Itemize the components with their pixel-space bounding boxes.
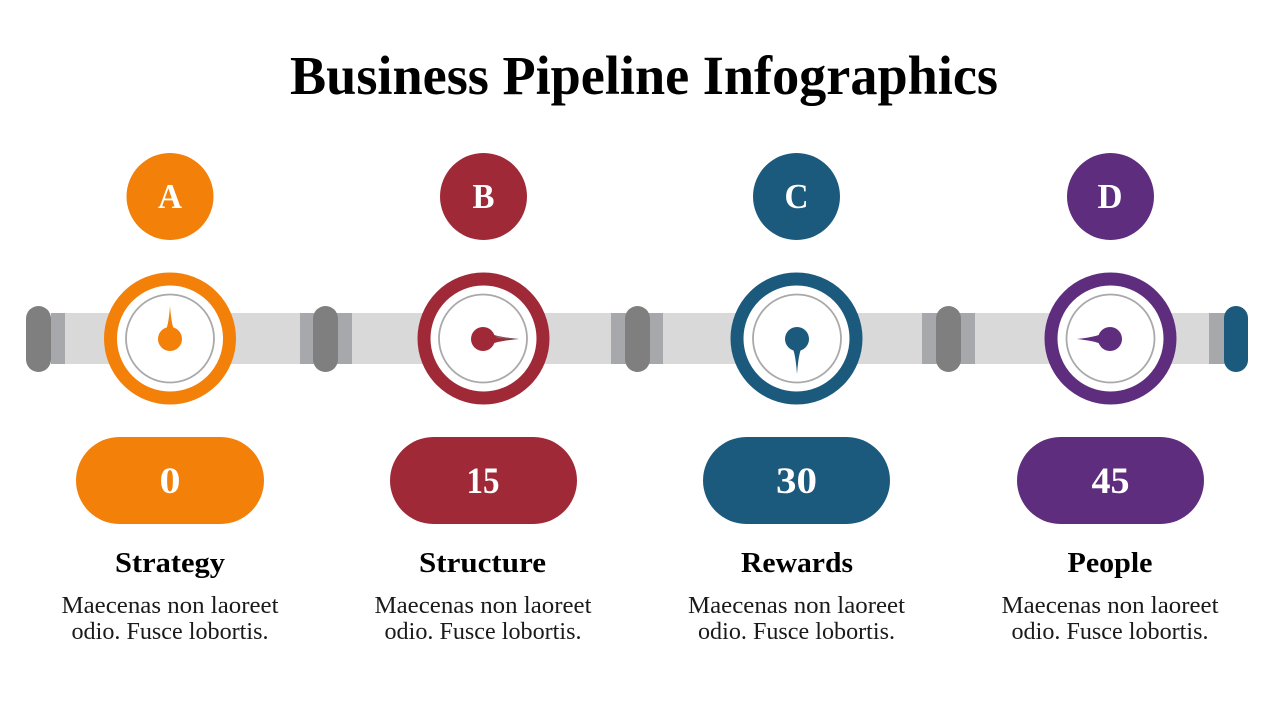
badge C [753,153,840,240]
description: Maecenas non laoreet [374,592,592,619]
badge A [126,153,214,240]
description [374,592,592,645]
description [62,592,279,645]
heading People: People [1068,547,1153,579]
description: Maecenas non laoreet [62,592,279,619]
gauge B at 15 [424,279,543,398]
column D: People [1002,153,1219,645]
description: odio. Fusce lobortis. [384,618,582,645]
value pill 0 [76,437,264,524]
value pill 30 [703,437,890,524]
title: Business Pipeline Infographics [290,45,998,106]
column B: Structure [374,153,592,645]
heading Rewards: Rewards [741,547,853,579]
badge D [1067,153,1154,240]
value pill 45 [1017,437,1204,524]
gauge C at 30 [737,279,856,398]
value pill 45: 45 [1092,461,1130,502]
description: odio. Fusce lobortis. [1012,618,1208,645]
description: odio. Fusce lobortis. [72,618,268,645]
badge D: D [1098,177,1122,216]
gauge D at 45 [1051,279,1170,398]
description [688,592,905,645]
description: odio. Fusce lobortis. [698,618,895,645]
badge C: C [784,177,808,216]
pipeline bar [26,306,1248,372]
value pill 30: 30 [776,461,817,502]
badge B [440,153,527,240]
column A: Strategy [62,153,279,645]
badge B: B [472,177,494,216]
description: Maecenas non laoreet [688,592,905,619]
value pill 15 [390,437,577,524]
description [1002,592,1219,645]
gauge A at 0 [110,279,230,398]
column C: Rewards [688,153,905,645]
badge A: A [158,177,183,216]
description: Maecenas non laoreet [1002,592,1219,619]
value pill 15: 15 [466,461,500,502]
heading Structure: Structure [419,547,546,579]
heading Strategy: Strategy [115,547,226,579]
value pill 0: 0 [160,461,180,502]
